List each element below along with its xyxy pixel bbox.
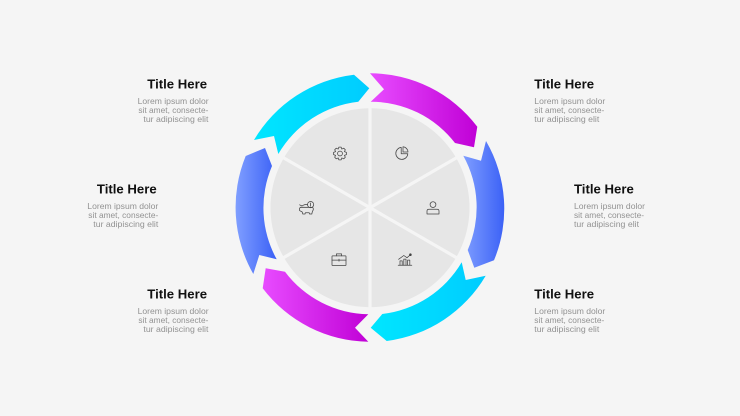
text block: bottom left xyxy=(138,286,209,334)
arrow: magenta bottom left xyxy=(263,268,368,342)
arrow: cyan top left xyxy=(254,75,369,154)
text block: middle left xyxy=(87,181,159,229)
arrow: blue right xyxy=(463,141,504,268)
text block: middle left: Title Here xyxy=(97,181,157,196)
text block: top right xyxy=(534,76,605,124)
text block: top right: Lorem ipsum dolor xyxy=(534,96,605,106)
text block: top right: tur adipiscing elit xyxy=(534,114,600,124)
arrow: blue left xyxy=(236,148,277,274)
text block: bottom right: sit amet, consecte- xyxy=(534,315,604,325)
text block: middle left: sit amet, consecte- xyxy=(88,210,158,220)
text block: middle left: tur adipiscing elit xyxy=(93,219,159,229)
text block: bottom right: Title Here xyxy=(534,286,594,301)
text block: bottom right xyxy=(534,286,605,334)
text block: middle right: sit amet, consecte- xyxy=(574,210,644,220)
text block: bottom left: Title Here xyxy=(147,286,207,301)
text block: middle left: Lorem ipsum dolor xyxy=(87,201,158,211)
arrow: cyan bottom right xyxy=(371,262,486,341)
icon: pie chart xyxy=(396,147,408,159)
icon: gear xyxy=(334,147,346,160)
text block: top right: Title Here xyxy=(534,76,594,91)
arrow: magenta top right xyxy=(370,73,477,147)
text block: top right: sit amet, consecte- xyxy=(534,105,604,115)
text block: top left xyxy=(138,76,209,124)
text block: middle right: tur adipiscing elit xyxy=(574,219,640,229)
text block: top left: tur adipiscing elit xyxy=(143,114,209,124)
text block: bottom right: tur adipiscing elit xyxy=(534,324,600,334)
icon: person xyxy=(427,202,439,214)
center pie with six segments xyxy=(270,104,470,311)
icon: piggy bank xyxy=(300,202,314,214)
text block: top left: sit amet, consecte- xyxy=(138,105,209,115)
icon: briefcase xyxy=(332,254,346,266)
text block: bottom left: tur adipiscing elit xyxy=(143,324,209,334)
text block: top left: Title Here xyxy=(147,76,207,91)
text block: bottom left: Lorem ipsum dolor xyxy=(138,306,209,316)
text block: middle right: Lorem ipsum dolor xyxy=(574,201,645,211)
text block: middle right: Title Here xyxy=(574,181,634,196)
text block: bottom left: sit amet, consecte- xyxy=(138,315,209,325)
text block: bottom right: Lorem ipsum dolor xyxy=(534,306,605,316)
text block: middle right xyxy=(574,181,645,229)
icon: bar chart with trend line xyxy=(398,254,412,265)
text block: top left: Lorem ipsum dolor xyxy=(138,96,209,106)
